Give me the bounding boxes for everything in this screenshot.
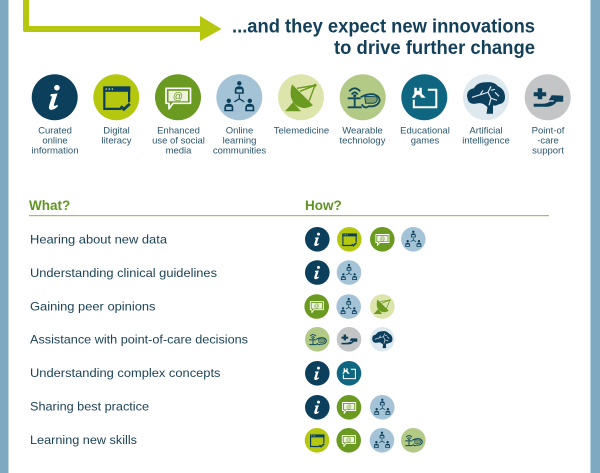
icon: artificial intelligence: intelligence <box>462 136 510 146</box>
arrow <box>23 0 222 41</box>
row: assistance with point-of-care decisions: Assistance with point-of-care decisions <box>30 332 248 346</box>
left border bar <box>0 0 8 473</box>
icon: wearable technology: technology <box>340 136 386 146</box>
row: gaining peer opinions <box>30 294 395 319</box>
row: sharing best practice: Sharing best practice <box>30 400 149 414</box>
icon: online learning communities: Online <box>226 126 253 136</box>
title: to drive further change <box>334 37 535 59</box>
icon: point-of-care support: Point-of <box>532 126 565 136</box>
icon: educational games <box>400 74 450 146</box>
icon: digital literacy: literacy <box>101 136 132 146</box>
icon: telemedicine: Telemedicine <box>274 126 329 136</box>
icon: curated online information: Curated <box>38 126 72 136</box>
icon: enhanced use of social media: media <box>166 146 192 156</box>
icon: artificial intelligence <box>462 74 510 146</box>
row: hearing about new data <box>30 227 426 252</box>
icon: digital literacy <box>93 74 139 146</box>
icon: curated online information <box>32 74 78 156</box>
icon: enhanced use of social media: Enhanced <box>157 126 200 136</box>
icon: point-of-care support: support <box>532 146 564 156</box>
title: ...and they expect new innovations <box>232 16 535 38</box>
innovation icons row <box>32 74 571 156</box>
row: learning new skills <box>30 428 426 453</box>
row: sharing best practice <box>30 395 395 420</box>
row: understanding complex concepts: Understanding complex concepts <box>30 366 221 380</box>
right border bar <box>590 0 600 473</box>
row: understanding clinical guidelines <box>30 260 361 285</box>
icon: enhanced use of social media <box>152 74 205 156</box>
icon: point-of-care support <box>525 74 571 156</box>
icon: online learning communities: learning <box>223 136 256 146</box>
icon: curated online information: information <box>32 146 78 156</box>
icon: educational games: Educational <box>400 126 450 136</box>
table heading: how: How? <box>305 198 342 213</box>
icon: enhanced use of social media: use of social <box>152 136 205 146</box>
icon: point-of-care support: -care <box>537 136 559 146</box>
row: understanding complex concepts <box>30 361 361 386</box>
row: learning new skills: Learning new skills <box>30 433 137 447</box>
icon: telemedicine <box>274 74 329 136</box>
table heading: what: What? <box>29 198 70 213</box>
icon: educational games: games <box>411 136 440 146</box>
row: gaining peer opinions: Gaining peer opinions <box>30 300 156 314</box>
icon: wearable technology <box>340 74 386 146</box>
row: hearing about new data: Hearing about new data <box>30 232 167 246</box>
icon: curated online information: online <box>42 136 68 146</box>
row: assistance with point-of-care decisions <box>30 327 395 352</box>
icon: wearable technology: Wearable <box>342 126 383 136</box>
icon: digital literacy: Digital <box>103 126 130 136</box>
icon: online learning communities <box>213 74 266 156</box>
title <box>232 16 535 59</box>
icon: artificial intelligence: Artificial <box>469 126 503 136</box>
icon: online learning communities: communities <box>213 146 266 156</box>
row: understanding clinical guidelines: Understanding clinical guidelines <box>30 266 217 280</box>
